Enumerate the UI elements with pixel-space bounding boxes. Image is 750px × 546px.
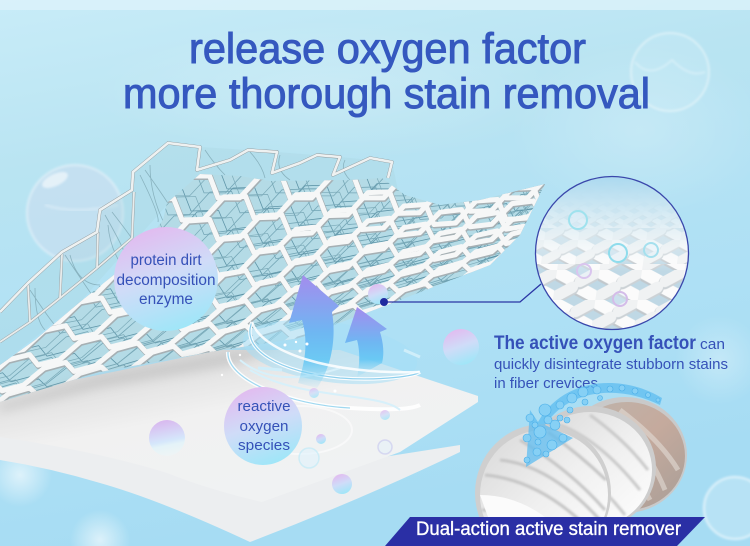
stain text block: in fiber crevices: [494, 375, 598, 392]
callout circle: protein dirt decomposition enzyme: decomposition: [116, 272, 216, 289]
fabric discs before and after: [475, 397, 687, 546]
front swirl ring: [252, 322, 420, 372]
bubble: right of swirl: [443, 329, 479, 365]
decorative bubble: left: [27, 165, 123, 261]
banner: dual-action active stain remover: [385, 517, 705, 546]
callout circle: protein dirt decomposition enzyme: protein dirt: [130, 252, 202, 269]
disc: half clean: [524, 406, 656, 530]
callout circle: protein dirt decomposition enzyme: enzyme: [139, 291, 193, 308]
stain text block: can: [700, 336, 725, 353]
mesh front layer: [0, 174, 545, 402]
stain text block: quickly disintegrate stubborn stains: [494, 356, 728, 373]
decorative bubble: top right: [631, 33, 709, 111]
small bubbles on sheets: [299, 388, 392, 494]
fibre mesh: [0, 141, 545, 402]
title: [123, 25, 650, 118]
upper white sheet: [0, 350, 478, 502]
arrow: small up arrow: [345, 307, 387, 377]
callout circle: reactive oxygen species: oxygen: [240, 418, 288, 435]
mesh back layer: [0, 143, 400, 365]
bubbles in circle: [569, 211, 658, 306]
callout leader line: [368, 284, 541, 306]
bubble arrow: [523, 383, 662, 467]
stain text block: The active oxygen factor: [494, 333, 697, 354]
title: more thorough stain removal: [123, 70, 650, 118]
title: release oxygen factor: [189, 25, 586, 73]
callout circle: protein dirt decomposition enzyme: [114, 227, 218, 331]
callout circle: reactive oxygen species: reactive: [238, 398, 290, 415]
stain text block: [494, 333, 728, 392]
sparkles: [221, 341, 336, 392]
callout circle: reactive oxygen species: [224, 387, 302, 465]
arrow: large up arrow: [289, 275, 339, 388]
lower white sheet: [0, 425, 460, 542]
callout circle: reactive oxygen species: species: [238, 437, 290, 454]
banner: dual-action active stain remover: Dual-action active stain remover: [416, 519, 682, 540]
magnified fibre circle: [534, 176, 690, 330]
bubble: on sheet: [149, 420, 185, 456]
disc: clean: [475, 424, 611, 546]
decorative bubble: bottom right: [704, 477, 750, 539]
swirl disc and rings: [228, 310, 421, 454]
shadow under mesh: [0, 341, 300, 412]
disc: stained: [563, 397, 687, 513]
